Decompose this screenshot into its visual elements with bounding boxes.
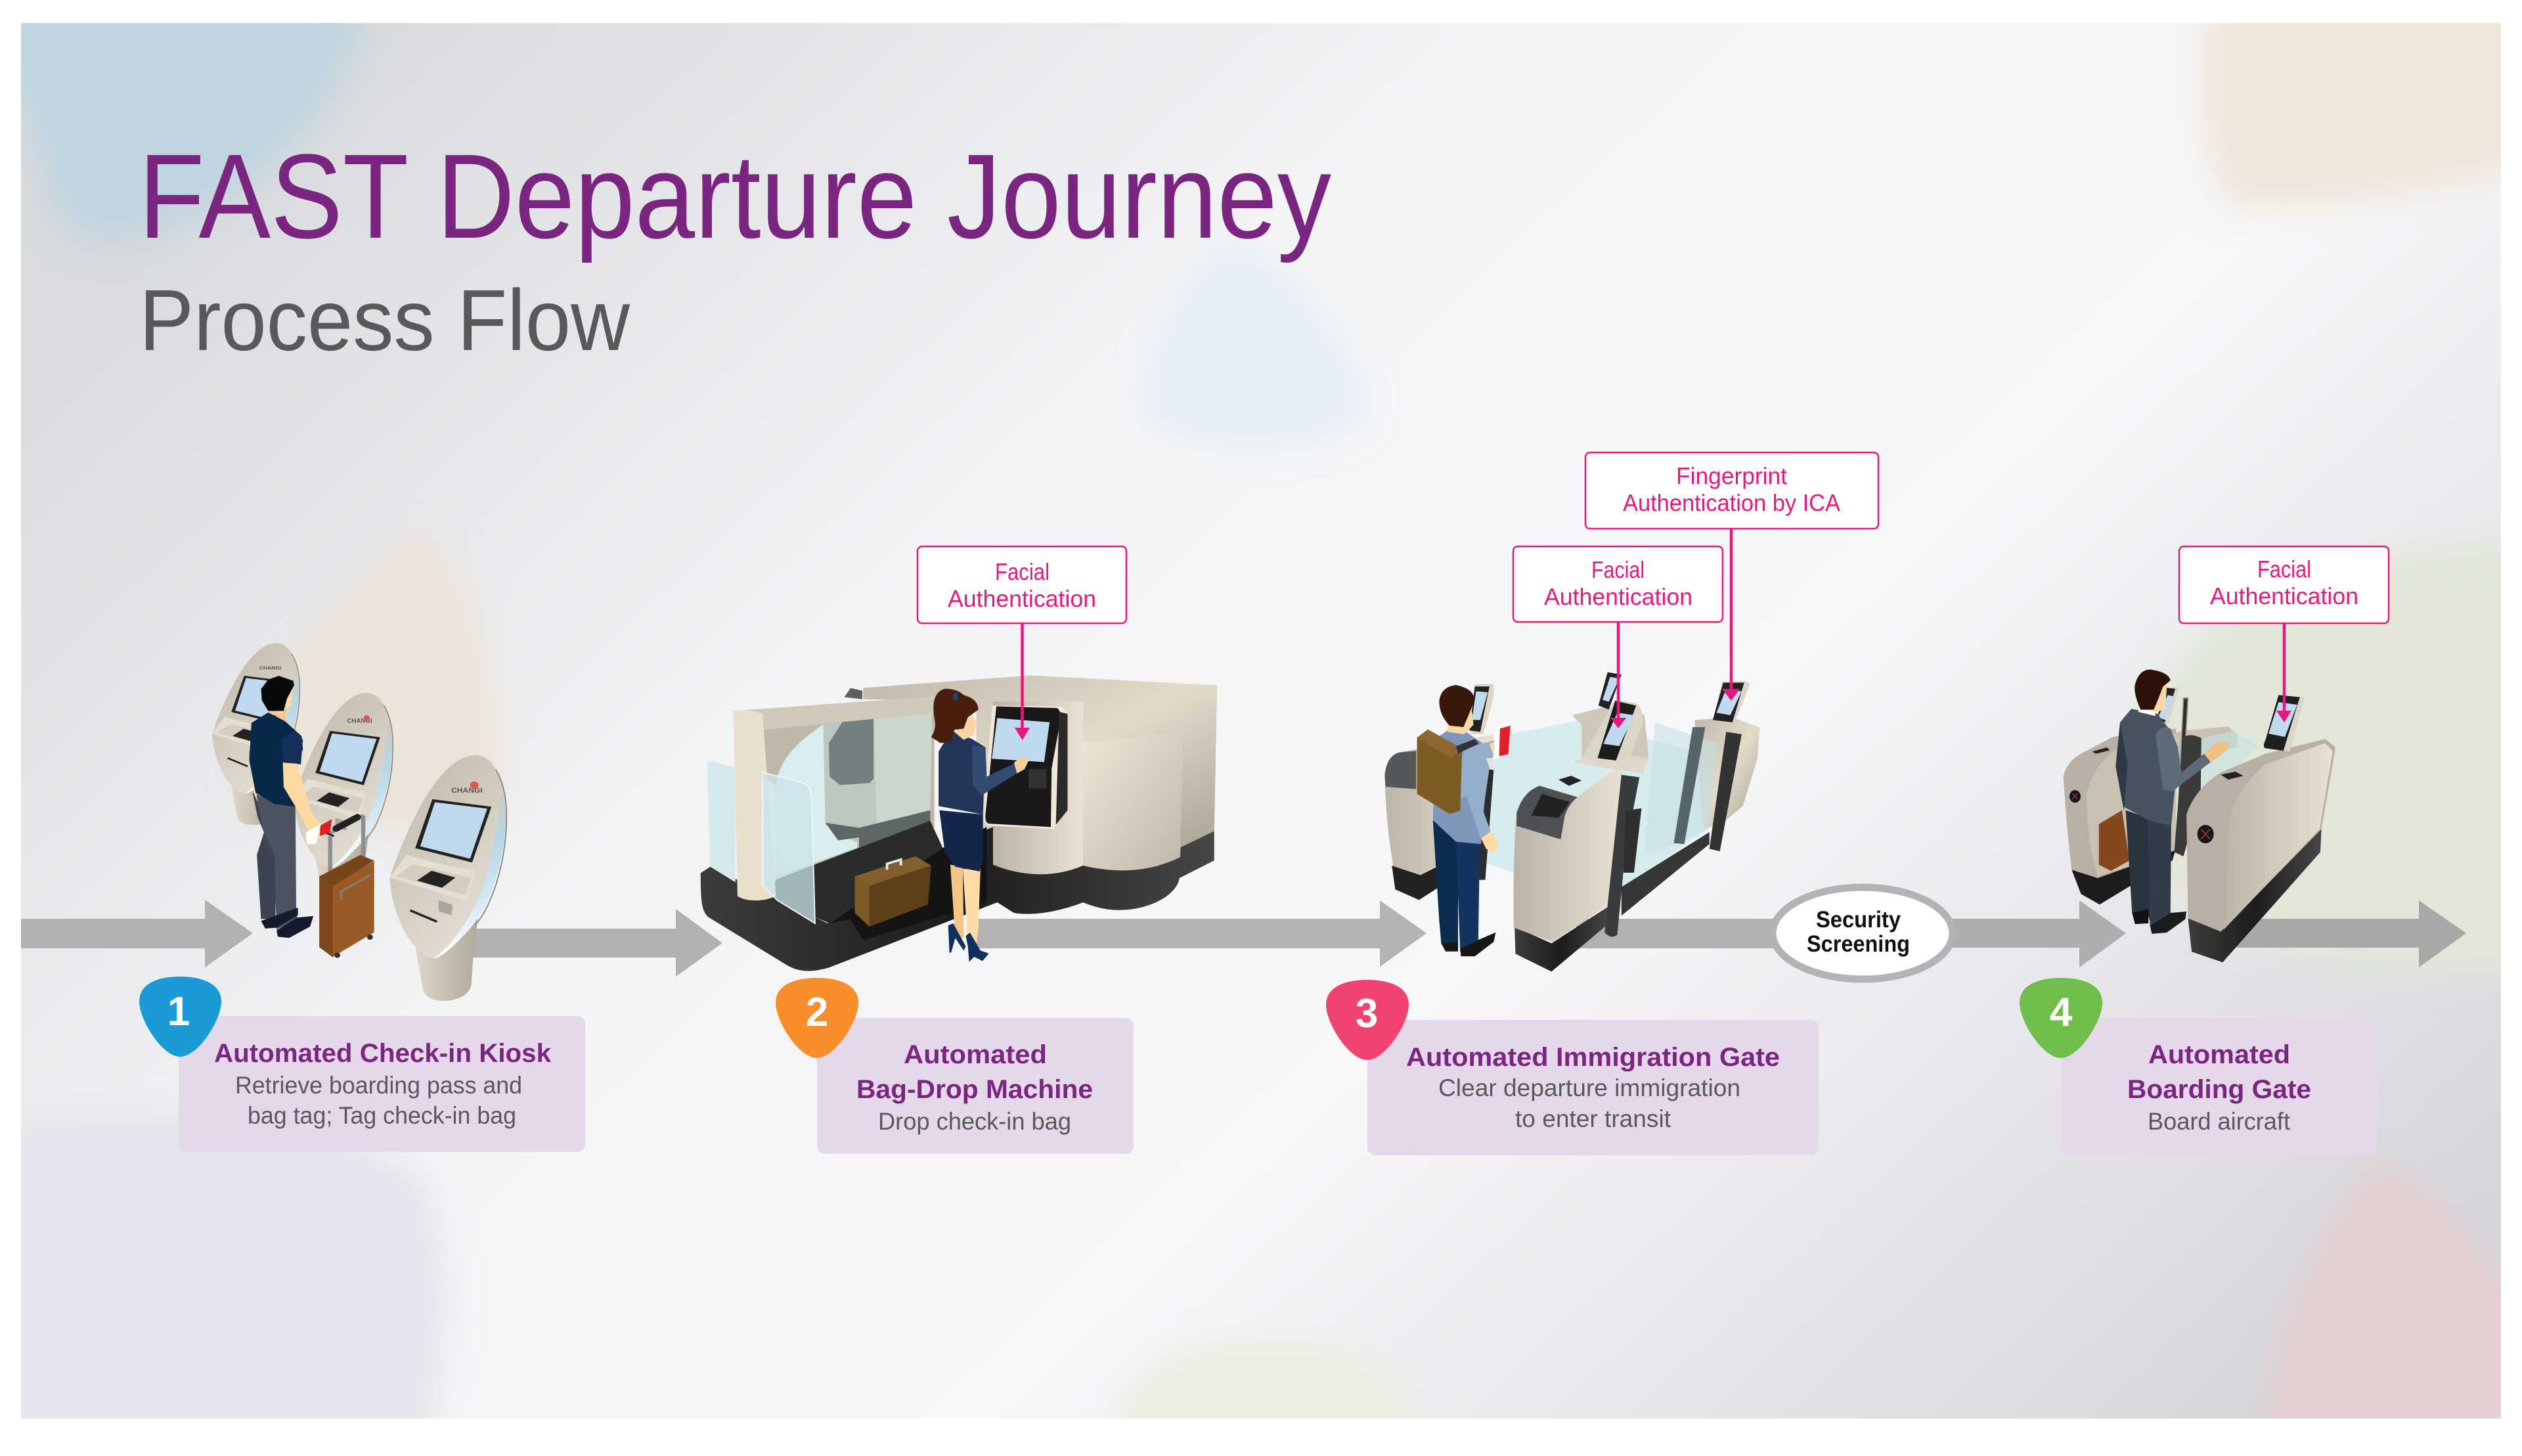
icon: rear kiosk: CHANGI (259, 665, 282, 671)
callout: facial authentication at boarding gate: Facial (2257, 556, 2311, 583)
badge: step 2 (776, 978, 858, 1058)
panel: step 3 label (1367, 1020, 1819, 1155)
panel: step 1 label: bag tag; Tag check-in bag (248, 1102, 516, 1129)
badge: step 2: 2 (806, 990, 828, 1035)
suitcase on belt (854, 856, 931, 927)
security screening node: Screening (1807, 931, 1910, 957)
callout: facial authentication at boarding gate (2179, 546, 2389, 722)
female passenger (931, 689, 1029, 962)
panel: step 1 label: Retrieve boarding pass and (235, 1072, 522, 1099)
machine front beam and post (734, 696, 935, 900)
arrow: security screening to boarding gate (1937, 900, 2126, 967)
callout: fingerprint authentication by ICA: Fingerprint (1676, 462, 1787, 489)
callout: facial authentication at immigration gate: Facial (1591, 556, 1645, 583)
arrow: exit from boarding gate (2226, 900, 2466, 967)
male passenger with backpack (1417, 685, 1511, 956)
machine back block (863, 675, 1217, 852)
front scanner (2264, 695, 2305, 751)
machine inner glass opening (775, 724, 859, 877)
callout: facial authentication at immigration gate (1513, 546, 1723, 728)
callout: facial authentication at immigration gate: Authentication (1544, 583, 1692, 610)
panel: step 4 label: Automated (2148, 1040, 2290, 1069)
machine black base (701, 827, 1214, 971)
machine lower pillar (993, 701, 1083, 874)
badge: step 1 (139, 977, 221, 1057)
badge: step 1: 1 (167, 989, 190, 1034)
machine right housing (1082, 732, 1183, 870)
illustration: boarding gate and passenger (2064, 669, 2335, 962)
icon: front kiosk: CHANGI (451, 787, 483, 795)
arrow: immigration gate to security screening (1576, 919, 1786, 948)
illustration: check-in kiosks and passenger (212, 643, 506, 1001)
rear scanner (2156, 687, 2179, 724)
panel: step 2 label: Automated (904, 1040, 1047, 1069)
icon: rear kiosk (212, 643, 299, 825)
glass side panels (707, 761, 815, 923)
badge: step 4 (2020, 978, 2102, 1058)
panel: step 3 label: Clear departure immigration (1438, 1074, 1740, 1101)
arrow: kiosk to bag drop (460, 909, 722, 977)
security screening node (1773, 887, 1953, 979)
icon: middle kiosk: CHANGI (347, 718, 372, 724)
callout: facial authentication at bag drop: Authentication (948, 585, 1096, 612)
suitcase (2099, 810, 2129, 871)
security screening node: Security (1816, 907, 1901, 933)
rear left gate (2064, 726, 2238, 904)
machine conveyor bay (830, 827, 986, 940)
panel: step 2 label (817, 1018, 1134, 1154)
callout: fingerprint authentication by ICA: Authentication by ICA (1623, 489, 1840, 516)
front scanner (1576, 700, 1648, 774)
glass lane (1485, 720, 1733, 887)
badge: step 4: 4 (2050, 990, 2073, 1035)
icon: suitcase (319, 816, 374, 958)
arrow: entry to kiosk (21, 900, 253, 967)
subtitle: Process Flow (139, 272, 630, 368)
badge: step 3 (1326, 980, 1409, 1060)
machine rear arch beam (763, 696, 935, 878)
badge: step 3: 3 (1356, 991, 1378, 1036)
panel: step 4 label: Board aircraft (2148, 1108, 2291, 1135)
icon: front kiosk (389, 755, 506, 1001)
panel: step 4 label (2061, 1018, 2378, 1154)
panel: step 2 label: Drop check-in bag (878, 1108, 1071, 1135)
businessman (2115, 669, 2229, 934)
machine inner scanner tunnel (824, 688, 932, 856)
touchscreen kiosk (984, 705, 1068, 829)
gate floor rail (1622, 832, 1710, 916)
panel: step 1 label: Automated Check-in Kiosk (214, 1039, 552, 1068)
callout: facial authentication at bag drop: Facial (995, 558, 1050, 585)
panel: step 3 label: to enter transit (1515, 1105, 1671, 1132)
panel: step 3 label: Automated Immigration Gate (1406, 1043, 1780, 1072)
right gate (1645, 681, 1759, 854)
illustration: immigration gate and passenger (1384, 673, 1759, 971)
machine dark belt band (769, 821, 942, 923)
rear centre scanner (1572, 673, 1648, 758)
callout: facial authentication at bag drop (918, 546, 1126, 740)
front gate (1513, 763, 1641, 971)
panel: step 2 label: Bag-Drop Machine (856, 1075, 1093, 1104)
panel: step 4 label: Boarding Gate (2127, 1075, 2311, 1104)
title: FAST Departure Journey (139, 129, 1331, 263)
callout: facial authentication at boarding gate: Authentication (2210, 583, 2358, 609)
arrow: bag drop to immigration gate (972, 900, 1427, 967)
callout: fingerprint authentication by ICA (1585, 452, 1878, 701)
front gate (2186, 739, 2335, 962)
rear left gate (1384, 684, 1494, 900)
panel: step 1 label (179, 1016, 585, 1152)
icon: middle kiosk (294, 693, 393, 904)
icon: male passenger at kiosk (250, 676, 332, 938)
gate glass and post (2174, 698, 2258, 856)
illustration: bag-drop machine and passenger (701, 675, 1217, 971)
